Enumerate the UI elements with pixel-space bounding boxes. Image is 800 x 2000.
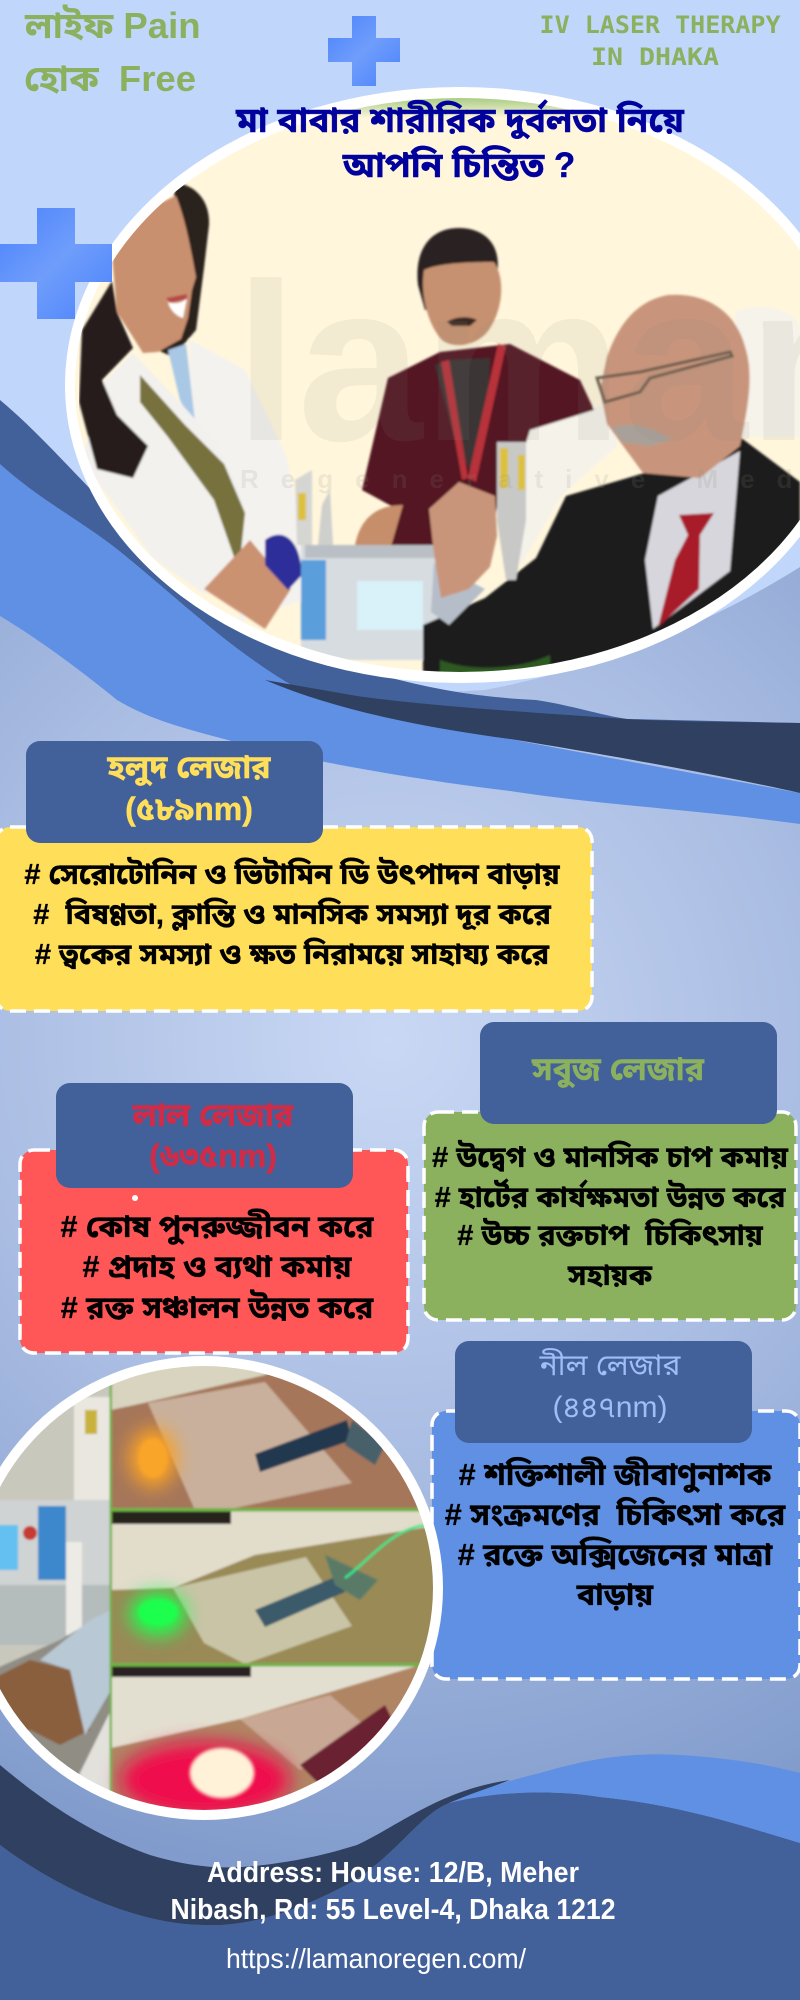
top wave decoration — [0, 400, 800, 824]
bottom photo circle: laser treatment on arm — [0, 1350, 443, 1830]
arm panel with orange glow — [110, 1374, 418, 1510]
panel: blue laser: # রক্তে অক্সিজেনের মাত্রা — [458, 1537, 773, 1572]
panel: blue laser: # শক্তিশালী জীবাণুনাশক — [459, 1457, 773, 1493]
title: IV laser therapy in Dhaka — [540, 11, 781, 71]
panel: green laser: সহায়ক — [567, 1260, 653, 1292]
panel: red laser: # রক্ত সঞ্চালন উন্নত করে — [61, 1290, 374, 1325]
brand slogan: লাইফ Pain — [24, 5, 201, 46]
panel: blue laser: # সংক্রমণের চিকিৎসা করে — [445, 1497, 786, 1532]
sleeve, fist and handpiece — [431, 563, 485, 625]
address: Nibash, Rd: 55 Level-4, Dhaka 1212 — [170, 1894, 616, 1926]
arm panel with red glow — [110, 1664, 418, 1810]
panel: red laser: # কোষ পুনরুজ্জীবন করে — [60, 1209, 374, 1245]
center man — [417, 228, 498, 310]
old man head — [600, 295, 750, 478]
panel: green laser — [424, 1022, 796, 1320]
panel: red laser: (৬৩৫nm) — [149, 1138, 277, 1174]
panel: green laser: # হার্টের কার্যক্ষমতা উন্নত করে — [435, 1179, 786, 1214]
panel: blue laser: বাড়ায় — [576, 1578, 654, 1612]
machine — [301, 545, 444, 660]
panel: red laser: # প্রদাহ ও ব্যথা কমায় — [82, 1250, 353, 1284]
top photo circle: doctors and patient with laser device — [65, 87, 800, 683]
panel: green laser: # উদ্বেগ ও মানসিক চাপ কমায় — [432, 1141, 789, 1174]
address — [170, 1857, 616, 1926]
old man suit — [423, 437, 800, 680]
panel: yellow laser: # ত্বকের সমস্যা ও ক্ষত নিরাময়ে সাহায্য করে — [35, 938, 550, 971]
main headline — [235, 100, 684, 185]
brand slogan: হোক Free — [24, 58, 196, 99]
website url: https://lamanoregen.com/ — [226, 1943, 526, 1974]
panel: red laser: লাল লেজার — [132, 1097, 294, 1133]
woman face — [112, 196, 196, 353]
arm panel with green glow — [110, 1526, 433, 1665]
title: IV laser therapy in Dhaka: IV LASER THERAPY — [540, 11, 781, 39]
back doctor — [153, 183, 209, 357]
panel: yellow laser: # বিষণ্ণতা, ক্লান্তি ও মানসিক সমস্যা দূর করে — [33, 898, 551, 931]
top cross icon — [328, 16, 400, 86]
panel: green laser: সবুজ লেজার — [531, 1051, 705, 1088]
title: IV laser therapy in Dhaka: IN DHAKA — [591, 43, 720, 71]
panel: blue laser: (৪৪৭nm) — [553, 1391, 667, 1424]
main headline: মা বাবার শারীরিক দুর্বলতা নিয়ে — [235, 100, 684, 141]
woman doctor coat — [85, 352, 228, 594]
hands and glove — [204, 540, 291, 629]
panel: yellow laser: (৫৮৯nm) — [125, 791, 253, 827]
main headline: আপনি চিন্তিত ? — [342, 145, 575, 185]
panel: yellow laser: # সেরোটোনিন ও ভিটামিন ডি উৎপাদন বাড়ায় — [24, 858, 561, 891]
panel: red laser — [20, 1083, 408, 1353]
brand slogan — [24, 5, 201, 99]
bottom wave decoration — [0, 1754, 800, 2000]
panel: blue laser — [432, 1341, 800, 1679]
panel: yellow laser — [0, 741, 592, 1011]
panel: blue laser: নীল লেজার — [539, 1347, 682, 1382]
panel: green laser: # উচ্চ রক্তচাপ চিকিৎসায় — [457, 1219, 764, 1252]
top light blue background shape — [0, 0, 800, 700]
address: Address: House: 12/B, Meher — [207, 1857, 579, 1889]
left cross icon — [0, 208, 112, 319]
panel: yellow laser: হলুদ লেজার — [106, 749, 271, 786]
